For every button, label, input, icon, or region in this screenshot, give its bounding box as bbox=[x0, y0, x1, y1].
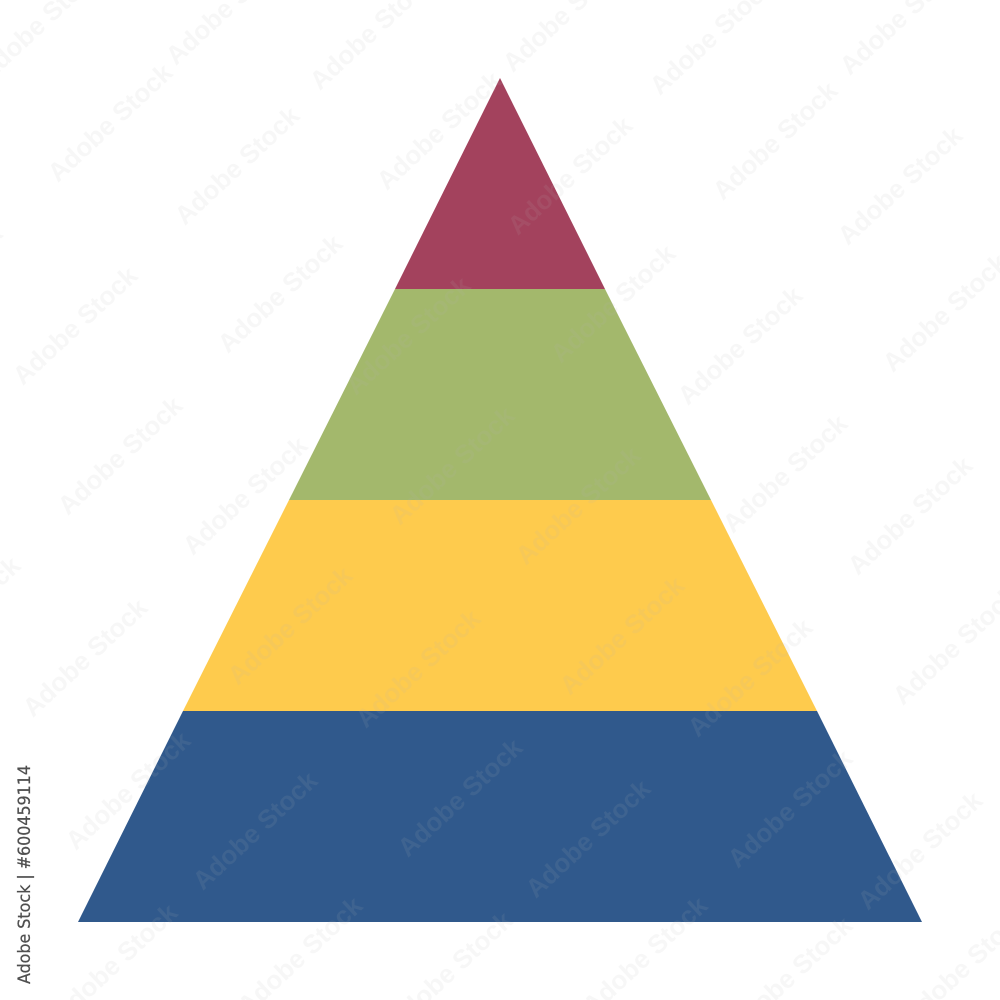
stock watermark pattern: Adobe Stock bbox=[212, 228, 349, 359]
stock watermark pattern: Adobe Stock bbox=[852, 785, 989, 916]
pyramid chart bbox=[78, 78, 922, 922]
stock watermark pattern: Adobe Stock bbox=[60, 725, 197, 856]
stock watermark pattern: Adobe Stock bbox=[554, 570, 691, 701]
stock watermark pattern: Adobe Stock bbox=[707, 75, 844, 206]
stock watermark pattern: Adobe Stock bbox=[384, 400, 521, 531]
stock watermark pattern: Adobe Stock bbox=[340, 270, 477, 401]
stock watermark pattern: Adobe Stock bbox=[717, 408, 854, 539]
stock watermark pattern: Adobe Stock bbox=[187, 765, 324, 896]
stock watermark pattern: Adobe Stock bbox=[682, 612, 819, 743]
stock watermark pattern: Adobe Stock bbox=[545, 238, 682, 369]
stock watermark pattern: Adobe Stock bbox=[350, 603, 487, 734]
stock watermark pattern: Adobe Stock bbox=[222, 560, 359, 691]
stock watermark pattern: Adobe Stock bbox=[52, 390, 189, 521]
stock watermark pattern: Adobe Stock bbox=[17, 592, 154, 723]
stock watermark pattern: Adobe Stock bbox=[832, 120, 969, 251]
stock watermark pattern: Adobe Stock bbox=[371, 65, 508, 196]
pyramid tier 1: top maroon bbox=[395, 78, 605, 289]
stock watermark pattern: Adobe Stock bbox=[842, 450, 979, 581]
stock image ID label: Adobe Stock | #600459114 bbox=[15, 765, 35, 984]
stock watermark pattern: Adobe Stock bbox=[177, 430, 314, 561]
stock watermark pattern: Adobe Stock bbox=[520, 773, 657, 904]
stock watermark pattern: Adobe Stock bbox=[169, 100, 306, 231]
stock watermark pattern: Adobe Stock bbox=[722, 743, 859, 874]
stock watermark pattern: Adobe Stock bbox=[42, 57, 179, 188]
stock watermark pattern: Adobe Stock bbox=[7, 260, 144, 391]
stock watermark pattern: Adobe Stock bbox=[510, 440, 647, 571]
stock watermark pattern: Adobe Stock bbox=[392, 732, 529, 863]
pyramid tier 4: bottom blue bbox=[78, 711, 922, 922]
pyramid tier 3: yellow bbox=[183, 500, 817, 711]
stock watermark pattern: Adobe Stock bbox=[672, 280, 809, 411]
stock watermark pattern: Adobe Stock bbox=[502, 110, 639, 241]
pyramid tier 2: green bbox=[289, 289, 711, 500]
